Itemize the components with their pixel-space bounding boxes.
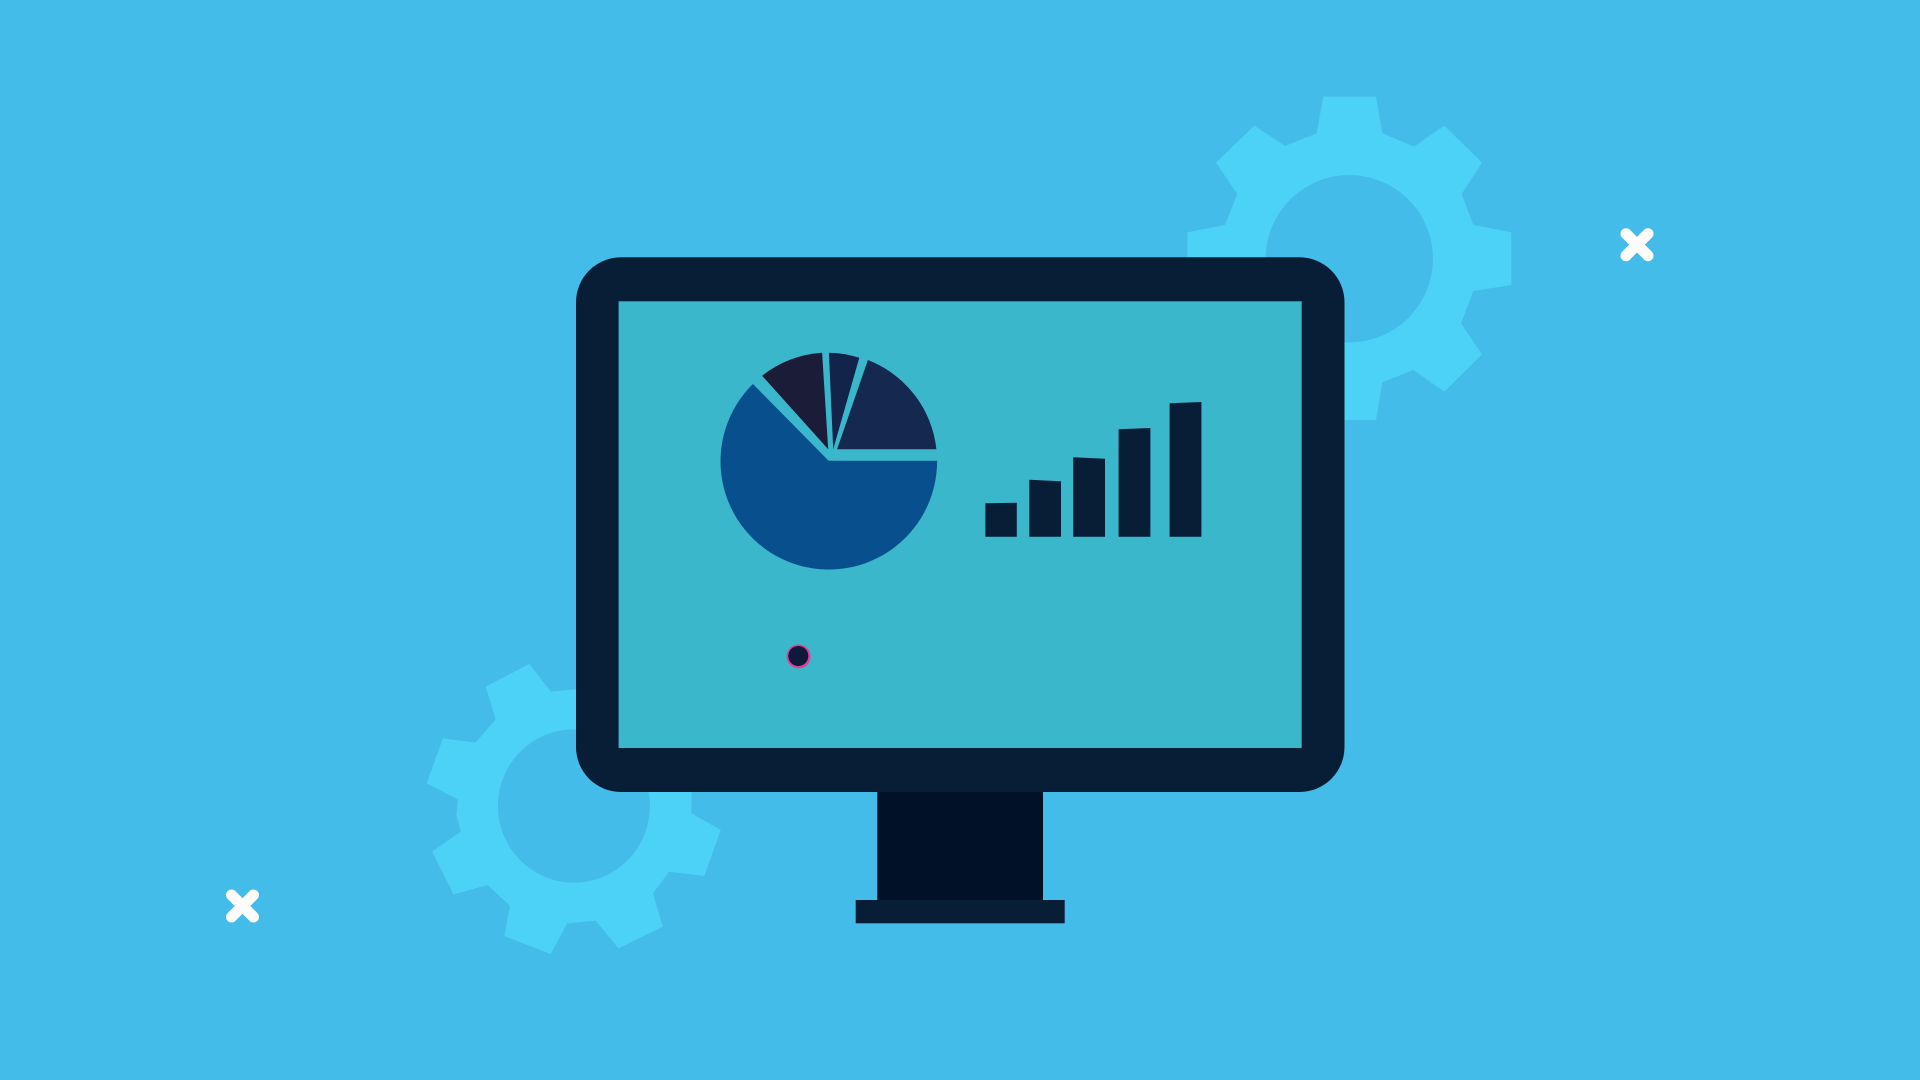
bar 3 — [1073, 457, 1105, 537]
monitor frame — [576, 257, 1344, 792]
monitor stand neck — [877, 790, 1043, 900]
pie slice: navy right — [837, 360, 936, 449]
monitor stand base — [856, 900, 1065, 923]
icon: white cross bottom left — [232, 895, 254, 917]
pie chart — [721, 353, 937, 570]
icon: gear bottom left — [427, 664, 721, 954]
bar 4 — [1119, 428, 1150, 537]
bar 1 — [985, 503, 1017, 537]
monitor screen — [619, 301, 1302, 748]
bar chart — [985, 402, 1201, 537]
icon: large gear top right — [1187, 97, 1511, 420]
pie slice: narrow navy — [829, 353, 859, 449]
bar 5 — [1170, 402, 1201, 537]
icon: white cross top right — [1626, 234, 1648, 256]
icon: small dot with pink ring — [787, 644, 811, 668]
pie slice: dark navy left — [762, 353, 828, 449]
monitor — [576, 257, 1344, 923]
pie slice: largest blue — [721, 384, 937, 570]
bar 2 — [1029, 480, 1061, 537]
